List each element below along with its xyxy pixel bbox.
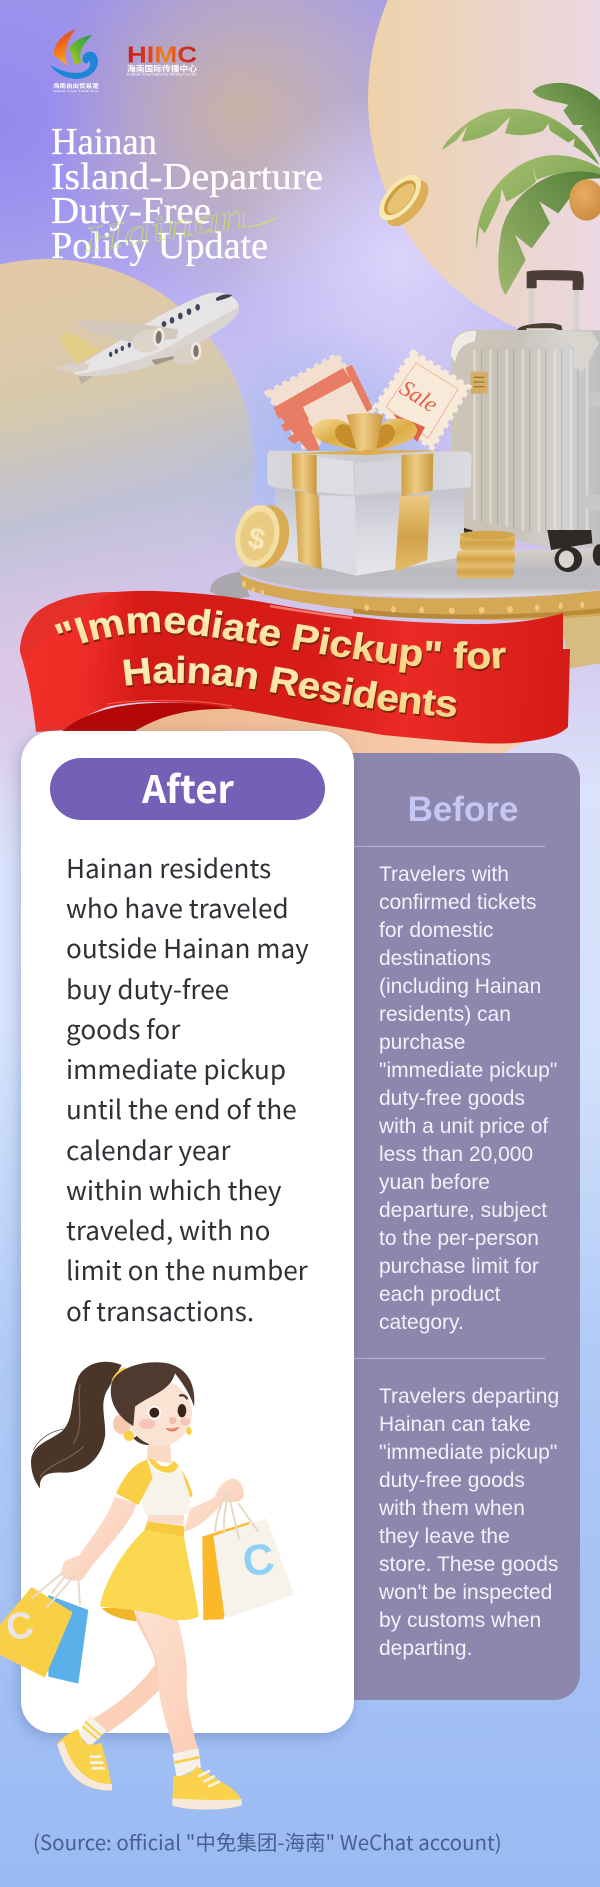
text block: before rule one: each product bbox=[379, 1283, 501, 1306]
text block: after rule: limit on the number bbox=[66, 1250, 309, 1288]
panel: after bbox=[21, 731, 354, 1733]
text block: after rule: outside Hainan may bbox=[66, 928, 309, 966]
text block: before rule one: duty-free goods bbox=[379, 1087, 525, 1110]
text block: before rule one: category. bbox=[379, 1311, 464, 1334]
illustration: girl with shopping bags: C bbox=[240, 1535, 277, 1587]
panel: before bbox=[300, 753, 580, 1700]
heading pill: after: After bbox=[141, 759, 234, 814]
icon: airplane bbox=[56, 292, 239, 384]
text block: before rule two: "immediate pickup" bbox=[379, 1441, 557, 1464]
icon: gold coin leaning on gift bbox=[230, 501, 295, 572]
text block: before rule one: for domestic bbox=[379, 919, 493, 942]
source note: (Source: official "中免集团-海南" WeChat account) bbox=[33, 1826, 502, 1856]
text block: before rule one: purchase limit for bbox=[379, 1255, 539, 1278]
icon: stacked gold coins bbox=[457, 531, 515, 578]
decorative shape: peach behind ribbon bbox=[132, 703, 532, 790]
text block: before rule two: by customs when bbox=[379, 1609, 541, 1632]
text block: before rule one: to the per-person bbox=[379, 1227, 539, 1250]
text block: after rule: who have traveled bbox=[66, 888, 289, 926]
logo: Hainan Free Trade Port: Hainan Free Trade Port bbox=[53, 89, 99, 93]
illustration: girl with shopping bags bbox=[0, 1362, 294, 1810]
decorative circle: top right bbox=[368, 0, 600, 350]
logo: Hainan Free Trade Port bbox=[50, 29, 99, 93]
text block: before rule two: won't be inspected bbox=[378, 1581, 552, 1604]
text block: before rule one: confirmed tickets bbox=[379, 891, 537, 914]
text block: before rule one: purchase bbox=[379, 1031, 465, 1054]
text block: before rule one: residents) can bbox=[379, 1003, 511, 1026]
text block: after rule: Hainan residents bbox=[66, 848, 271, 886]
text block: before rule one: Travelers with bbox=[379, 863, 509, 886]
logo: HIMC: HIMC bbox=[127, 42, 197, 68]
ribbon title: Hainan Residents bbox=[123, 656, 458, 719]
text block: before rule two: with them when bbox=[378, 1497, 525, 1520]
ribbon banner bbox=[20, 590, 570, 744]
text block: before rule one: departure, subject bbox=[379, 1199, 547, 1222]
text block: after rule: within which they bbox=[66, 1170, 282, 1208]
title: Duty-Free bbox=[51, 190, 211, 232]
script accent: Hainan: Hainan bbox=[79, 195, 250, 260]
title: Island-Departure bbox=[51, 156, 323, 198]
text block: before rule one: (including Hainan bbox=[379, 975, 541, 998]
text block: after rule: goods for bbox=[66, 1009, 181, 1047]
text block: after rule: traveled, with no bbox=[66, 1210, 270, 1248]
logo: HIMC: Hainan International Media Center bbox=[127, 72, 198, 76]
text block: after rule: immediate pickup bbox=[66, 1049, 286, 1087]
title: Hainan bbox=[51, 121, 157, 163]
decorative circle: left bbox=[0, 259, 254, 673]
icon: gold coin leaning on gift: $ bbox=[245, 521, 268, 557]
text block: before rule one: "immediate pickup" bbox=[379, 1059, 557, 1082]
text block: after rule: until the end of the bbox=[66, 1089, 297, 1127]
text block: after rule: calendar year bbox=[66, 1130, 232, 1168]
text block: before rule two: Hainan can take bbox=[379, 1413, 531, 1436]
title bbox=[51, 121, 323, 267]
text block: after rule bbox=[66, 848, 309, 1329]
text block: after rule: of transactions. bbox=[66, 1291, 254, 1329]
icon: palm leaves with coconut bbox=[442, 83, 600, 295]
icon: red ticket bbox=[267, 355, 373, 451]
icon: sale ticket bbox=[375, 352, 469, 448]
logo: HIMC: 海南国际传播中心 bbox=[127, 64, 197, 75]
text block: before rule one: yuan before bbox=[379, 1171, 490, 1194]
text block: before rule one bbox=[378, 863, 557, 1334]
text block: before rule two: Travelers departing bbox=[379, 1385, 559, 1408]
heading pill: after bbox=[50, 758, 325, 820]
icon: sale ticket: Sale bbox=[395, 375, 442, 417]
icon: suitcase body bbox=[451, 330, 600, 572]
text block: before rule two: duty-free goods bbox=[379, 1469, 525, 1492]
text block: after rule: buy duty-free bbox=[66, 969, 229, 1007]
title: Policy Update bbox=[51, 225, 268, 267]
text block: before rule two: they leave the bbox=[379, 1525, 510, 1548]
icon: suitcase handle bbox=[517, 270, 584, 332]
logo: Hainan Free Trade Port: 海南自由贸易港 bbox=[53, 82, 99, 90]
icon: gift box bbox=[267, 413, 472, 576]
ribbon title: "Immediate Pickup" for bbox=[54, 608, 508, 675]
logo: HIMC bbox=[127, 42, 198, 76]
text block: before rule one: destinations bbox=[379, 947, 491, 970]
icon: flying gold coin bbox=[371, 168, 436, 233]
ribbon title bbox=[54, 608, 508, 719]
illustration: girl with shopping bags: C bbox=[3, 1602, 37, 1649]
text block: before rule one: less than 20,000 bbox=[379, 1143, 533, 1166]
text block: before rule one: with a unit price of bbox=[378, 1115, 548, 1138]
text block: before rule two bbox=[378, 1385, 559, 1660]
podium bbox=[210, 548, 600, 668]
heading: before: Before bbox=[408, 790, 518, 829]
script accent: Hainan bbox=[79, 195, 276, 260]
text block: before rule two: departing. bbox=[379, 1637, 472, 1660]
text block: before rule two: store. These goods bbox=[379, 1553, 558, 1576]
